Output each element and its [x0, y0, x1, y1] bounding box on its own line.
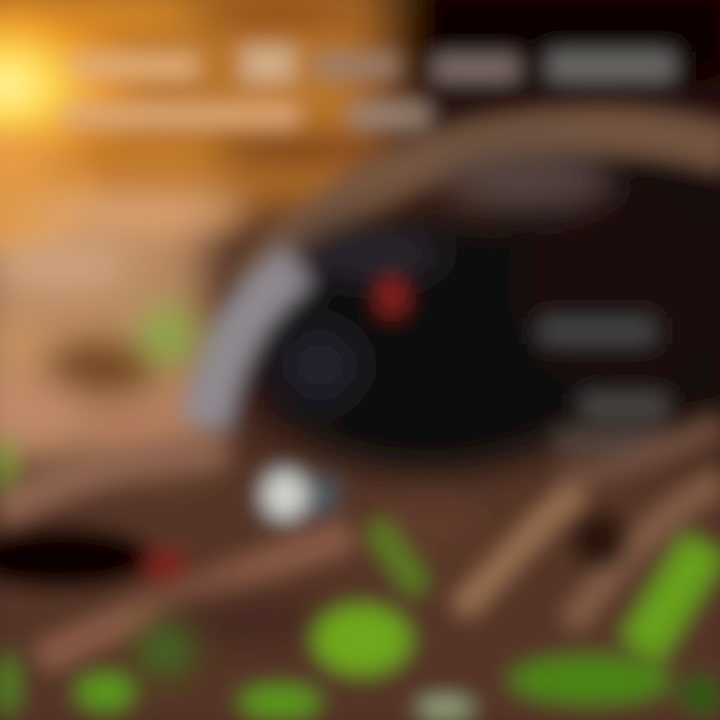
roots and forest floor: [0, 425, 720, 660]
green foliage: [0, 307, 720, 718]
title text block (blurred): [62, 46, 674, 126]
mid left ground patches: [0, 241, 200, 449]
mole eye: [378, 278, 406, 316]
white highlight near snout: [263, 471, 337, 519]
side text blocks (blurred): [540, 318, 670, 452]
mole fur ridge: [250, 131, 720, 290]
sun glare: [0, 0, 390, 250]
mole body: [205, 150, 720, 470]
